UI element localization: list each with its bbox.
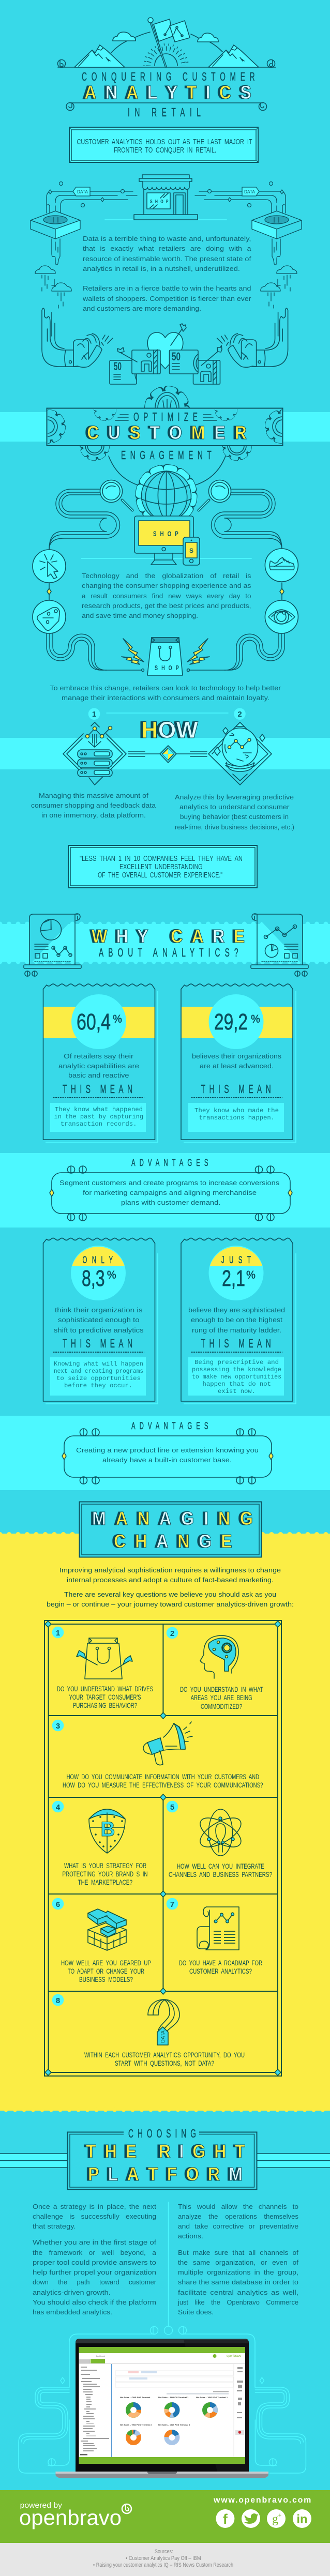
text block: sources: • Raising your customer analytics IQ – RIS News Custom Research bbox=[93, 2562, 233, 2568]
meaning box: happen that do not bbox=[203, 1381, 271, 1388]
text block: platform left column: proper tool could provide answers to bbox=[33, 2259, 156, 2266]
background: yellow managing change section bbox=[0, 1534, 330, 2111]
stat description: enough to be on the highest bbox=[191, 1316, 282, 1324]
panel: advantages two: already have a built-in customer base. bbox=[102, 1456, 232, 1464]
footer: openbravo logo: powered by bbox=[20, 2501, 63, 2510]
question 8: WITHIN EACH CUSTOMER ANALYTICS OPPORTUNITY, DO YOU bbox=[84, 2051, 245, 2059]
heading: engagement: ENGAGEMENT bbox=[121, 449, 216, 462]
question 4: WHAT IS YOUR STRATEGY FOR bbox=[64, 1861, 146, 1870]
question 2 bbox=[167, 1627, 263, 1710]
stat description: believes their organizations bbox=[192, 1052, 282, 1060]
banner: choosing the right platform: THE RIGHT bbox=[86, 2141, 253, 2162]
panel: advantages one: Segment customers and create programs to increase conversions bbox=[59, 1179, 280, 1187]
text block: improving analytical sophistication: Improving analytical sophistication requires a willingness to change bbox=[59, 1566, 281, 1574]
text block: managing massive amount: in one inmemory, data platform. bbox=[41, 811, 146, 819]
dashed divider bbox=[53, 1097, 144, 1098]
stat bubble bbox=[71, 1246, 126, 1300]
text block: improving analytical sophistication bbox=[47, 1566, 294, 1608]
icon: facebook bbox=[216, 2509, 234, 2528]
banner: managing change: CHANGE bbox=[114, 1531, 241, 1552]
icon: gears above the banner bbox=[82, 389, 250, 459]
meaning box: to make new opportunities bbox=[192, 1373, 281, 1381]
icon: data tag left: DATA bbox=[77, 189, 88, 194]
icon: central diamond connector bbox=[128, 746, 207, 763]
stat bubble: ONLY bbox=[83, 1255, 118, 1266]
text block: data is a terrible thing to waste: analytics in retail is, in a nutshell, underutilized. bbox=[83, 265, 240, 272]
screen shop labels bbox=[153, 529, 193, 554]
stat bubble: % bbox=[107, 1268, 116, 1281]
icon: twitter bbox=[242, 2509, 260, 2528]
callout: less than 1 in 10 companies: EXCELLENT UNDERSTANDING bbox=[119, 862, 203, 871]
text block: platform right column: the same organization, or even of bbox=[178, 2259, 298, 2266]
badge: number two: 2 bbox=[237, 710, 242, 719]
illustration: hand holding money left bbox=[42, 308, 113, 367]
footer: green band bbox=[0, 2490, 330, 2543]
badge: number two bbox=[234, 708, 246, 720]
text block: managing massive amount: Managing this massive amount of bbox=[39, 792, 148, 799]
stat bubble: % bbox=[246, 1268, 256, 1281]
text block: platform right column: and take corrective or preventative bbox=[178, 2222, 298, 2230]
icon: cursor click bbox=[33, 550, 66, 600]
illustration: flag on the mountains bbox=[58, 18, 276, 67]
text block: analyze with predictive analytics: buying behavior (best customers in bbox=[180, 813, 289, 821]
icon: crystal ball with chart bbox=[208, 722, 272, 785]
badge: number one: 1 bbox=[92, 710, 96, 719]
heading: why care about analytics bbox=[92, 926, 253, 960]
question 7: 7 bbox=[170, 1900, 174, 1909]
question 6 bbox=[52, 1898, 151, 1983]
text block: platform left column: down the path toward customer bbox=[33, 2278, 157, 2286]
text block: data is a terrible thing to waste: and customers are more demanding. bbox=[83, 305, 201, 312]
text block: improving analytical sophistication: begin – or continue – your journey toward customer analytics-driven growth: bbox=[47, 1600, 294, 1608]
icon: facebook: f bbox=[223, 2511, 228, 2527]
stat bubble: JUST bbox=[221, 1255, 256, 1266]
stripes beside platform banner bbox=[0, 2154, 330, 2168]
text block: platform left column: has embedded analytics. bbox=[33, 2308, 112, 2316]
footer: sources band bbox=[0, 2543, 330, 2576]
meaning box: transaction records. bbox=[61, 1120, 137, 1128]
title: CONQUERING CUSTOMER bbox=[82, 71, 259, 84]
question 1 bbox=[52, 1627, 153, 1709]
meaning box: before they occur. bbox=[64, 1382, 132, 1389]
chart: net sales donut 2: Net Sales – PB POS Terminal 1 bbox=[158, 2396, 189, 2399]
text block: platform right column: But make sure that all channels of bbox=[178, 2249, 298, 2256]
chart: net sales donut 3 bbox=[196, 2396, 228, 2416]
question 1: YOUR TARGET CONSUMER'S bbox=[69, 1693, 141, 1701]
question 4: PROTECTING YOUR BRAND S IN bbox=[62, 1870, 148, 1878]
text block: data is a terrible thing to waste: that is exactly what retailers are doing with a bbox=[83, 245, 251, 252]
title: IN RETAIL bbox=[128, 107, 205, 119]
stat bubble bbox=[71, 994, 126, 1049]
stat bubble: 2,1 bbox=[222, 1266, 245, 1291]
screen shop labels: S bbox=[189, 547, 193, 554]
text block: data is a terrible thing to waste: wallets of shoppers. Competition is fiercer than ever bbox=[82, 295, 251, 302]
illustration: monitor and phone shop bbox=[82, 516, 251, 565]
text block: platform left column: challenge is successfully executing bbox=[33, 2213, 156, 2220]
text block: platform right column: analyze the operations themselves bbox=[178, 2213, 298, 2220]
question 1: 1 bbox=[56, 1629, 60, 1638]
stat bubble bbox=[209, 994, 264, 1049]
text block: sources bbox=[93, 2549, 233, 2568]
background: light band behind customer engagement banner bbox=[0, 412, 330, 442]
question 1: DO YOU UNDERSTAND WHAT DRIVES bbox=[57, 1685, 153, 1693]
illustration: data pipes left bbox=[31, 182, 137, 308]
icon: data tag left bbox=[73, 187, 90, 196]
meaning box bbox=[50, 1103, 146, 1132]
stat bubble: 8,3 bbox=[82, 1266, 105, 1291]
meaning box: Being prescriptive and bbox=[194, 1359, 279, 1366]
text block: data is a terrible thing to waste: Data is a terrible thing to waste and, unfortunately, bbox=[83, 235, 251, 243]
banner: managing change bbox=[80, 1502, 263, 1557]
stat description bbox=[54, 1306, 144, 1334]
question 4: B bbox=[100, 1818, 115, 1841]
stat figure: % bbox=[113, 1012, 122, 1025]
question 3 bbox=[52, 1720, 263, 1789]
meaning box bbox=[50, 1357, 146, 1396]
title ribbon bbox=[66, 102, 267, 111]
text block: data is a terrible thing to waste bbox=[82, 235, 251, 312]
question 6: HOW WELL ARE YOU GEARED UP bbox=[61, 1959, 151, 1967]
footer: website: www.openbravo.com bbox=[213, 2496, 311, 2505]
meaning box: in the past by capturing bbox=[54, 1113, 143, 1120]
stat figure: % bbox=[251, 1012, 260, 1025]
icon: google plus bbox=[267, 2509, 286, 2528]
text block: platform left column: analytics-driven growth. bbox=[33, 2289, 111, 2296]
stat description: analytic capabilities are bbox=[58, 1062, 139, 1070]
stat figure: 60,4 bbox=[77, 1009, 111, 1035]
text block: technology and globalization: research products, get the best prices and products, bbox=[82, 602, 251, 610]
heading: how: HOW bbox=[141, 717, 199, 743]
text block: to embrace this change bbox=[50, 684, 281, 702]
illustration: shop bbox=[105, 175, 227, 220]
banner: choosing the right platform bbox=[67, 2128, 257, 2189]
text block: platform right column: actions. bbox=[178, 2232, 203, 2240]
panel: advantages two: ADVANTAGES bbox=[131, 1421, 213, 1432]
background: wavy light band behind why care bbox=[0, 924, 330, 962]
question 2: COMMODITIZED? bbox=[201, 1702, 242, 1710]
text block: analyze with predictive analytics bbox=[175, 793, 294, 831]
icon: linkedin: in bbox=[296, 2512, 308, 2526]
chart: net sales donut 5 bbox=[158, 2423, 190, 2443]
question 5: CHANNELS AND BUSINESS PARTNERS? bbox=[169, 1870, 272, 1878]
stat description: shift to predictive analytics bbox=[54, 1326, 144, 1334]
text block: improving analytical sophistication: There are several key questions we believe you should ask as you bbox=[64, 1590, 276, 1598]
banner: managing change: MANAGING bbox=[92, 1508, 263, 1529]
dashed divider bbox=[191, 1097, 282, 1098]
panel: advantages one: plans with customer demand. bbox=[121, 1199, 220, 1206]
text block: platform right column: Suite does. bbox=[178, 2308, 214, 2316]
dashed divider bbox=[191, 1352, 282, 1353]
panel: advantages two: Creating a new product line or extension knowing you bbox=[76, 1446, 259, 1454]
this mean heading: THIS MEAN bbox=[201, 1083, 275, 1096]
callout: last major frontier bbox=[69, 127, 258, 162]
question 7: CUSTOMER ANALYTICS? bbox=[189, 1967, 252, 1975]
icon: price tag bbox=[33, 600, 66, 633]
callout: less than 1 in 10 companies: "LESS THAN 1 IN 10 COMPANIES FEEL THEY HAVE AN bbox=[80, 854, 243, 863]
illustration: globe on a gear bbox=[139, 468, 193, 522]
text block: technology and globalization: a result consumers find new ways every day to bbox=[82, 592, 251, 600]
chart: net sales donut 2 bbox=[158, 2396, 189, 2416]
icon: shoe bbox=[265, 549, 298, 582]
illustration: left connected pipes bbox=[47, 489, 144, 671]
text block: platform left column: Once a strategy is in place, the next bbox=[33, 2203, 156, 2210]
footer: openbravo logo: openbravo bbox=[19, 2506, 122, 2529]
meaning box: exist now. bbox=[218, 1388, 256, 1395]
text block: platform left column bbox=[33, 2203, 157, 2316]
meaning box: possessing the knowledge bbox=[192, 1366, 281, 1373]
background: advantages band two bbox=[0, 1416, 330, 1490]
icon: data tag right bbox=[242, 187, 259, 196]
text block: platform right column: This would allow the channels to bbox=[178, 2203, 298, 2210]
screen shop labels: SHOP bbox=[153, 529, 182, 538]
icon: data tag right: DATA bbox=[244, 189, 255, 194]
meaning box: Knowing what will happen bbox=[54, 1360, 143, 1368]
text block: data is a terrible thing to waste: resource of inestimable worth. The present state of bbox=[83, 255, 251, 263]
callout: less than 1 in 10 companies: OF THE OVERALL CUSTOMER EXPERIENCE." bbox=[98, 871, 222, 880]
banner: optimize customer: OPTIMIZE bbox=[133, 411, 202, 424]
chart: net sales donut 4: Net Sales – VBS POS Terminal 3 bbox=[120, 2423, 152, 2426]
callout: last major frontier: FRONTIER TO CONQUER IN RETAIL. bbox=[114, 146, 216, 155]
text block: analyze with predictive analytics: real-time, drive business decisions, etc.) bbox=[175, 823, 294, 831]
panel: stat 60.4 percent bbox=[43, 984, 158, 1142]
illustration: laptop with analytics screen bbox=[55, 2339, 268, 2478]
icon: magnifier right bbox=[199, 480, 231, 510]
this mean heading: THIS MEAN bbox=[201, 1338, 275, 1351]
banknote values: 50 bbox=[114, 360, 122, 373]
banner: optimize customer: CUSTOMER bbox=[87, 422, 256, 443]
banknote values: 50 bbox=[172, 350, 181, 363]
question 6: 6 bbox=[56, 1900, 60, 1909]
stat description: basic and reactive bbox=[68, 1071, 129, 1079]
meaning box bbox=[188, 1103, 284, 1132]
title bbox=[82, 71, 260, 119]
banner: choosing the right platform: CHOOSING bbox=[128, 2128, 200, 2141]
chart: net sales donut 1: Net Sales – CMS POS Terminal bbox=[120, 2396, 150, 2399]
icon: linkedin bbox=[293, 2509, 311, 2528]
panel: advantages two bbox=[62, 1421, 273, 1484]
background: light band behind how bbox=[0, 738, 330, 769]
text block: platform left column: Whether you are in the first stage of bbox=[33, 2238, 156, 2246]
text block: managing massive amount bbox=[31, 792, 156, 819]
question 3: 3 bbox=[56, 1722, 60, 1731]
stat description: are at least advanced. bbox=[200, 1062, 274, 1070]
text block: sources: • Customer Analytics Pay Off – IBM bbox=[126, 2555, 201, 2562]
illustration: heart, arrows and banknotes bbox=[110, 324, 222, 384]
illustration: report scroll left bbox=[24, 914, 81, 976]
text block: analyze with predictive analytics: analytics to understand consumer bbox=[179, 803, 290, 811]
question 4 bbox=[52, 1801, 148, 1886]
meaning box: They know what happened bbox=[55, 1106, 143, 1113]
text block: platform left column: the framework or well beyond, a bbox=[33, 2249, 157, 2256]
stat description: believe they are sophisticated bbox=[188, 1306, 285, 1314]
question 8: START WITH QUESTIONS, NOT DATA? bbox=[115, 2059, 214, 2067]
banner: choosing the right platform: PLATFORM bbox=[88, 2164, 251, 2185]
stat description: Of retailers say their bbox=[64, 1052, 134, 1060]
chart: net sales donut 4 bbox=[120, 2423, 152, 2443]
text block: platform right column: just like the Openbravo Commerce bbox=[177, 2298, 298, 2306]
text block: improving analytical sophistication: internal processes and adopt a culture of fact-based marketing. bbox=[67, 1576, 274, 1584]
panel: stat 29.2 percent bbox=[181, 984, 296, 1142]
panel: advantages one: ADVANTAGES bbox=[131, 1158, 213, 1169]
question 4: 4 bbox=[56, 1803, 61, 1812]
illustration: hand holding money right bbox=[217, 308, 288, 367]
question 5: 5 bbox=[170, 1803, 174, 1812]
chart: net sales donut 5: Net Sales – VBS POS Terminal 3 bbox=[158, 2423, 190, 2426]
heading: why care about analytics: WHY CARE bbox=[92, 926, 253, 947]
app screen: openbravo bbox=[227, 2355, 242, 2358]
text block: technology and globalization: changing the consumer shopping experience and as bbox=[82, 582, 251, 589]
question 7: DO YOU HAVE A ROADMAP FOR bbox=[179, 1959, 262, 1967]
question 8: DATA bbox=[160, 2031, 166, 2043]
meaning box bbox=[188, 1357, 284, 1396]
question 8 bbox=[52, 1994, 245, 2067]
text block: platform right column: facilitate central analytics as well, bbox=[178, 2289, 298, 2296]
question 2: AREAS YOU ARE BEING bbox=[191, 1693, 252, 1702]
illustration: shopping bag with lightning bbox=[122, 638, 209, 675]
stat description: sophisticated enough to bbox=[58, 1316, 140, 1324]
text block: platform right column: multiple organizations in the group, bbox=[178, 2268, 298, 2276]
stat figure: 29,2 bbox=[214, 1009, 248, 1035]
illustration: right connected pipes bbox=[187, 489, 284, 671]
shop label: SHOP bbox=[150, 199, 171, 204]
text block: data is a terrible thing to waste: Retailers are in a fierce battle to win the hearts and bbox=[83, 284, 251, 292]
icon: google plus: g bbox=[272, 2512, 278, 2526]
question 2: 2 bbox=[170, 1629, 174, 1638]
text block: technology and globalization: Technology and the globalization of retail is bbox=[82, 572, 251, 580]
icon: in-memory server bbox=[63, 722, 126, 785]
panel: advantages one: for marketing campaigns and aligning merchandise bbox=[83, 1189, 257, 1196]
question 6: TO ADAPT OR CHANGE YOUR bbox=[68, 1967, 144, 1975]
connecting arcs bbox=[109, 456, 226, 485]
callout: last major frontier: CUSTOMER ANALYTICS HOLDS OUT AS THE LAST MAJOR IT bbox=[77, 138, 252, 146]
ornament: light frame around laptop bbox=[19, 2202, 306, 2473]
this mean heading: THIS MEAN bbox=[63, 1338, 137, 1351]
banknote values bbox=[114, 350, 181, 373]
panel: stat 2.1 percent bbox=[181, 1238, 296, 1404]
question 5: HOW WELL CAN YOU INTEGRATE bbox=[177, 1862, 264, 1870]
chart: net sales donut 1 bbox=[120, 2396, 150, 2416]
stat description: rung of the maturity ladder. bbox=[192, 1326, 281, 1334]
stat bubble bbox=[209, 1246, 264, 1300]
panel: stat 8.3 percent bbox=[43, 1238, 158, 1404]
chart: net sales donut 3: Net Sales – VBS POS Terminal 1 bbox=[196, 2396, 228, 2399]
stat description bbox=[188, 1306, 285, 1334]
app screen bbox=[79, 2347, 245, 2464]
text block: to embrace this change: manage their interactions with consumers and maintain loyalty. bbox=[62, 694, 269, 702]
title: ANALYTICS bbox=[84, 82, 260, 103]
bag label: SHOP bbox=[155, 665, 183, 672]
question 6: BUSINESS MODELS? bbox=[79, 1975, 133, 1983]
text block: managing massive amount: consumer shopping and feedback data bbox=[31, 801, 156, 809]
text block: to embrace this change: To embrace this change, retailers can look to technology to help better bbox=[50, 684, 281, 692]
text block: platform left column: that strategy. bbox=[33, 2222, 76, 2230]
question 7 bbox=[167, 1898, 262, 1975]
background: advantages band one bbox=[0, 1153, 330, 1228]
stat description: think their organization is bbox=[55, 1306, 143, 1314]
app screen: Dashboard bbox=[96, 2355, 105, 2357]
question 8: 8 bbox=[56, 1996, 60, 2005]
meaning box: to seize opportunities bbox=[56, 1375, 141, 1382]
question 1: PURCHASING BEHAVIOR? bbox=[73, 1701, 137, 1709]
banner: optimize customer bbox=[47, 407, 283, 446]
text block: platform right column bbox=[177, 2203, 298, 2316]
this mean heading: THIS MEAN bbox=[63, 1083, 137, 1096]
text block: platform right column: share the same database in order to bbox=[178, 2278, 298, 2286]
meaning box: transactions happen. bbox=[199, 1114, 275, 1122]
panel: advantages one bbox=[50, 1158, 292, 1221]
text block: platform left column: You should also check if the platform bbox=[33, 2298, 156, 2306]
meaning box: next and creating programs bbox=[54, 1368, 143, 1375]
meaning box: They know who made the bbox=[194, 1107, 279, 1114]
icon: google plus: + bbox=[278, 2512, 281, 2519]
text block: analyze with predictive analytics: Analyze this by leveraging predictive bbox=[175, 793, 294, 801]
text block: technology and globalization: and save time and money shopping. bbox=[82, 612, 198, 619]
app folder tree bbox=[80, 2367, 109, 2455]
text block: sources: Sources: bbox=[155, 2549, 173, 2555]
icon: magnifier left bbox=[100, 480, 132, 510]
stat description bbox=[58, 1052, 139, 1079]
stat description bbox=[192, 1052, 282, 1070]
illustration: data pipes right bbox=[195, 182, 302, 308]
badge: number one bbox=[88, 708, 100, 720]
dashed divider bbox=[53, 1352, 144, 1353]
question 4: THE MARKETPLACE? bbox=[78, 1878, 132, 1886]
icon: eye bbox=[265, 583, 298, 633]
callout: less than 1 in 10 companies bbox=[68, 845, 257, 888]
text block: technology and globalization bbox=[82, 572, 251, 619]
laptop body bbox=[55, 2339, 268, 2478]
heading: why care about analytics: ABOUT ANALYTICS? bbox=[99, 947, 243, 960]
grid frame: key questions bbox=[44, 1620, 281, 2076]
illustration: report scroll right bbox=[251, 914, 308, 976]
question 5 bbox=[167, 1801, 272, 1878]
text block: platform left column: help further propel your organization bbox=[33, 2268, 156, 2276]
question 2: DO YOU UNDERSTAND IN WHAT bbox=[180, 1685, 263, 1693]
